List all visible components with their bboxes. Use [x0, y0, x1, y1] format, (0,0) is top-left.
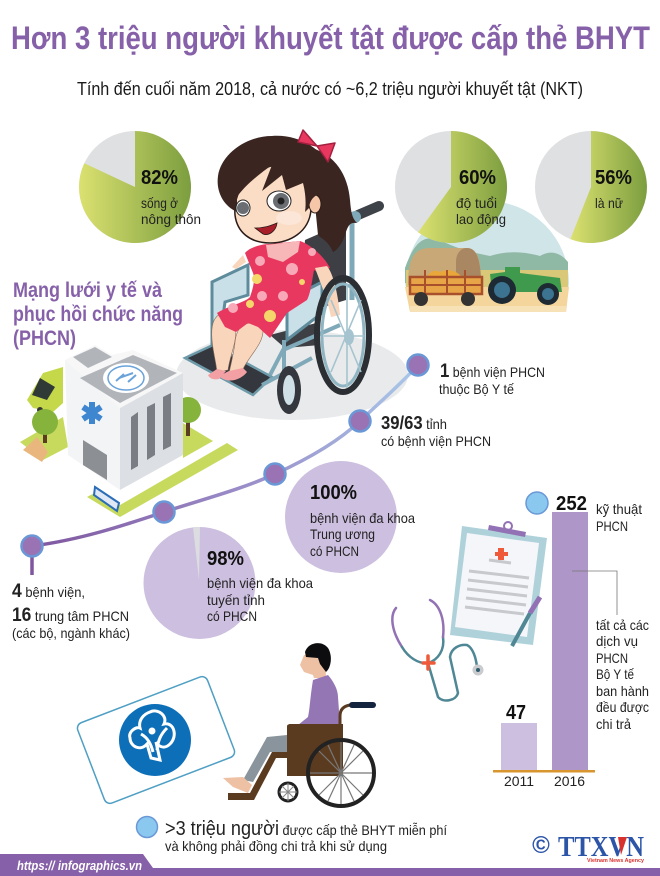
logo circle	[119, 704, 191, 776]
label: 1 hospital: thuộc Bộ Y tế	[439, 381, 514, 397]
hair	[218, 136, 332, 212]
large rear wheel	[317, 278, 369, 392]
insurance statement text	[165, 818, 447, 854]
label: all services covered: tất cả các	[596, 617, 649, 633]
building right face	[120, 373, 183, 490]
insurance statement text: và không phải đồng chi trả khi sử dụng	[165, 838, 387, 854]
label: 39/63 provinces: có bệnh viện PHCN	[381, 433, 491, 449]
network heading: phục hồi chức năng	[13, 303, 183, 326]
wheelchair back and handle	[298, 206, 379, 315]
label: 39/63 provinces	[381, 413, 491, 449]
insurance statement text: >3 triệu người được cấp thẻ BHYT miễn phí	[165, 818, 447, 840]
bullet dot	[136, 816, 158, 838]
leg	[243, 735, 287, 782]
bar chart	[493, 492, 595, 789]
tree right	[175, 397, 201, 436]
ear	[309, 195, 321, 213]
label: all services covered: Bộ Y tế	[596, 666, 634, 682]
pie chart: 60% working age: lao động	[456, 211, 506, 227]
label: techniques	[596, 501, 642, 534]
pie chart: 100% central hospitals	[285, 461, 415, 573]
chair	[228, 724, 343, 800]
network nodes	[22, 354, 428, 556]
network heading: Mạng lưới y tế và	[13, 279, 162, 302]
floor shadow under wheelchair	[176, 330, 408, 420]
bar 2011	[501, 723, 537, 771]
tree left	[32, 409, 58, 443]
label: 1 hospital	[439, 361, 545, 397]
pie chart: 100% central hospitals: Trung ương	[310, 526, 375, 542]
logo flower	[130, 711, 174, 760]
footer bar	[0, 854, 660, 876]
label: 1 hospital: 1 bệnh viện PHCN	[440, 361, 545, 382]
windows	[131, 393, 171, 470]
label: all services covered: chi trả	[596, 716, 631, 732]
pie chart: 100% central hospitals: 100%	[310, 482, 357, 504]
foot	[223, 777, 252, 793]
wheelchair seat and frame	[212, 265, 340, 385]
pie chart: 56% female: là nữ	[595, 195, 623, 211]
pie chart: 98% provincial hospitals	[144, 527, 313, 639]
network heading	[13, 279, 183, 350]
arms	[232, 255, 340, 317]
label: 4 hospitals, 16 centres	[12, 581, 130, 641]
label: 4 hospitals, 16 centres: 16 trung tâm PHCN	[12, 605, 129, 626]
pie chart: 98% provincial hospitals: có PHCN	[207, 608, 257, 624]
pie chart: 82% rural: sống ở	[141, 195, 178, 211]
small front wheel	[277, 366, 301, 414]
dress	[217, 241, 330, 338]
pie chart: 60% working age: 60%	[459, 167, 496, 189]
mouth	[255, 223, 277, 235]
wheelchair footrest	[185, 345, 272, 395]
hospital sign	[94, 487, 119, 511]
insurance card	[76, 675, 236, 805]
illustration: girl in wheelchair	[185, 130, 379, 414]
label: all services covered: ban hành	[596, 683, 649, 699]
pie chart: 100% central hospitals: bệnh viện đa khoa	[310, 510, 415, 526]
building left face	[65, 360, 120, 490]
pie chart: 60% working age: độ tuổi	[456, 195, 497, 211]
pie chart: 100% central hospitals: có PHCN	[310, 543, 359, 559]
axis	[493, 770, 595, 772]
head	[300, 643, 331, 678]
torso	[298, 675, 340, 725]
agency name: TTXVN	[558, 831, 644, 863]
label: all services covered: PHCN	[596, 650, 628, 666]
pie chart: 82% rural: nông thôn	[141, 211, 201, 227]
bar 2016	[552, 512, 588, 771]
footer bar: https:// infographics.vn	[17, 859, 142, 873]
legs and shoes	[208, 313, 263, 381]
pie chart: 82% rural: 82%	[141, 167, 178, 189]
label: all services covered: đều được	[596, 699, 649, 715]
medical cross	[83, 402, 101, 424]
helipad	[103, 363, 149, 393]
label: techniques: kỹ thuật	[596, 501, 642, 517]
label: 4 hospitals, 16 centres: (các bộ, ngành khác)	[12, 625, 130, 641]
network line	[32, 365, 418, 575]
handle	[349, 702, 376, 708]
leader line	[572, 571, 617, 615]
bow	[298, 130, 335, 162]
pie chart: 56% female	[535, 131, 647, 243]
pie chart: 56% female: 56%	[595, 167, 632, 189]
man in wheelchair	[223, 643, 376, 806]
label: 4 hospitals, 16 centres: 4 bệnh viện,	[12, 581, 85, 602]
ambulance	[27, 367, 63, 413]
rear wheel	[308, 740, 374, 806]
label: all services covered: dịch vụ	[596, 633, 638, 649]
year 2011: 2011	[504, 773, 534, 789]
label: all services covered	[596, 617, 649, 732]
bench	[23, 437, 48, 462]
eyes	[236, 191, 291, 216]
hospital illustration	[20, 345, 238, 517]
clipboard illustration	[450, 522, 547, 646]
network heading: (PHCN)	[13, 327, 76, 350]
front wheel	[279, 783, 297, 801]
pen	[512, 613, 530, 646]
entrance	[83, 440, 107, 480]
label: 39/63 provinces: 39/63 tỉnh	[381, 413, 447, 433]
copyright mark: ©	[532, 832, 550, 859]
year 2016: 2016	[554, 773, 585, 789]
label: techniques: PHCN	[596, 518, 628, 534]
face	[235, 165, 311, 243]
cheek	[276, 211, 302, 225]
illustration: tractor on farm	[405, 201, 569, 312]
lawn	[20, 417, 238, 517]
subtitle: Tính đến cuối năm 2018, cả nước có ~6,2 triệu người khuyết tật (NKT)	[77, 79, 583, 99]
building roof	[65, 345, 183, 408]
value 252: 252	[556, 493, 587, 515]
ponytail	[312, 148, 357, 252]
pie chart: 60% working age	[395, 131, 507, 243]
pie chart: 98% provincial hospitals: bệnh viện đa khoa	[207, 575, 313, 591]
pie chart: 82% rural	[79, 131, 201, 243]
agency subline: Vietnam News Agency	[587, 858, 645, 864]
blue dot	[526, 492, 548, 514]
agency logo	[532, 831, 645, 864]
stethoscope illustration	[392, 600, 484, 700]
value 47: 47	[506, 702, 526, 724]
pie chart: 98% provincial hospitals: 98%	[207, 548, 244, 570]
pie chart: 98% provincial hospitals: tuyến tỉnh	[207, 592, 265, 608]
red accent on V	[618, 837, 627, 855]
